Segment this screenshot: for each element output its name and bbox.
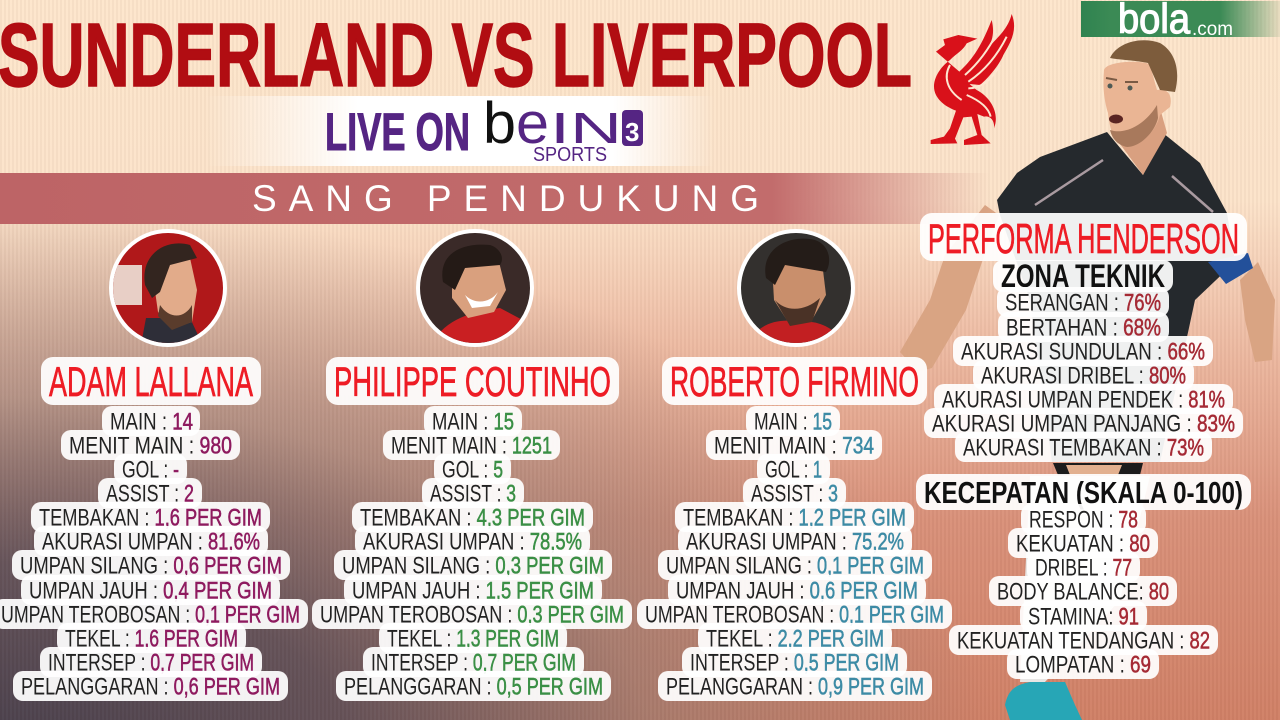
stats: Kecepatan: KEKUATAN : 80 — [1016, 530, 1150, 558]
stats: Zona Teknik: AKURASI SUNDULAN : 66% — [961, 338, 1205, 366]
stats: Kecepatan: LOMPATAN : 69 — [1015, 652, 1151, 678]
stats: Philippe Coutinho — [312, 406, 632, 701]
stats: Kecepatan: BODY BALANCE: 80 — [997, 578, 1169, 606]
stats: Philippe Coutinho: AKURASI UMPAN : 78,5% — [363, 528, 582, 556]
stats: Roberto Firmino: UMPAN SILANG : 0,1 PER GIM — [666, 552, 924, 580]
stats: Adam Lallana: MENIT MAIN : 980 — [69, 432, 232, 460]
stats: Adam Lallana — [0, 406, 308, 701]
stats: Adam Lallana: INTERSEP : 0,7 PER GIM — [48, 650, 254, 676]
stats: Adam Lallana: GOL : - — [122, 456, 179, 484]
stats: Adam Lallana: TEKEL : 1,6 PER GIM — [65, 626, 238, 652]
subheading: Zona Teknik: ZONA TEKNIK — [1001, 258, 1165, 294]
section banner: Sang Pendukung: SANG PENDUKUNG — [252, 178, 759, 219]
stats: Adam Lallana: UMPAN TEROBOSAN : 0,1 PER GIM — [1, 602, 300, 628]
stats: Roberto Firmino — [637, 406, 952, 701]
stats: Zona Teknik: BERTAHAN : 68% — [1006, 314, 1161, 342]
panel: Philippe Coutinho — [312, 229, 632, 701]
stats: Roberto Firmino: UMPAN JAUH : 0,6 PER GIM — [676, 578, 918, 604]
stats: Kecepatan — [949, 504, 1218, 679]
photo: Jordan Henderson — [900, 40, 1275, 720]
panel: Roberto Firmino — [637, 229, 952, 701]
brand: bola.com — [1081, 0, 1280, 42]
broadcast strip: live on beIN Sports: e — [516, 91, 549, 156]
stats: Adam Lallana: MAIN : 14 — [110, 408, 193, 436]
section banner: Sang Pendukung — [0, 173, 990, 224]
name: Roberto Firmino — [662, 357, 927, 405]
broadcast strip: live on beIN Sports: SPORTS — [533, 144, 607, 166]
panel: Performa Henderson — [916, 213, 1251, 679]
stats: Roberto Firmino: INTERSEP : 0,5 PER GIM — [690, 650, 899, 676]
stats: Philippe Coutinho: UMPAN JAUH : 1,5 PER GIM — [352, 578, 594, 604]
name: Adam Lallana — [41, 357, 261, 405]
stats: Philippe Coutinho: ASSIST : 3 — [430, 480, 516, 508]
stats: Roberto Firmino: ASSIST : 3 — [751, 480, 838, 508]
stats: Zona Teknik: AKURASI TEMBAKAN : 73% — [963, 434, 1204, 462]
stats: Adam Lallana: AKURASI UMPAN : 81,6% — [42, 528, 260, 556]
stats: Zona Teknik: SERANGAN : 76% — [1005, 290, 1161, 316]
stats: Zona Teknik: AKURASI UMPAN PANJANG : 83% — [932, 410, 1235, 438]
stats: Philippe Coutinho: UMPAN TEROBOSAN : 0,3 PER GIM — [320, 602, 624, 628]
stats: Roberto Firmino: MAIN : 15 — [754, 408, 832, 436]
stats: Philippe Coutinho: MAIN : 15 — [432, 408, 514, 436]
stats: Philippe Coutinho: PELANGGARAN : 0,5 PER GIM — [344, 674, 603, 700]
icon: Liverpool liver bird crest — [931, 14, 1014, 145]
stats: Adam Lallana: ASSIST : 2 — [106, 480, 194, 508]
stats: Philippe Coutinho: GOL : 5 — [442, 456, 503, 484]
stats: Roberto Firmino: TEMBAKAN : 1,2 PER GIM — [683, 504, 906, 532]
name: Roberto Firmino: ROBERTO FIRMINO — [670, 358, 919, 405]
broadcast strip: live on beIN Sports — [205, 91, 715, 166]
stats: Roberto Firmino: AKURASI UMPAN : 75,2% — [686, 528, 904, 556]
stats: Adam Lallana: UMPAN JAUH : 0,4 PER GIM — [29, 578, 272, 604]
stats: Kecepatan: STAMINA: 91 — [1028, 604, 1139, 630]
portrait: Roberto Firmino — [737, 229, 855, 350]
name: Philippe Coutinho — [326, 357, 619, 405]
broadcast strip: live on beIN Sports: 3 — [625, 117, 639, 147]
stats: Philippe Coutinho: INTERSEP : 0,7 PER GIM — [371, 650, 576, 676]
name: Adam Lallana: ADAM LALLANA — [49, 358, 253, 405]
stats: Adam Lallana: UMPAN SILANG : 0,6 PER GIM — [20, 552, 282, 580]
stats: Kecepatan: RESPON : 78 — [1029, 506, 1138, 534]
broadcast strip: live on beIN Sports: b — [483, 91, 516, 156]
stats: Philippe Coutinho: UMPAN SILANG : 0,3 PER GIM — [342, 552, 604, 580]
stats: Kecepatan: KEKUATAN TENDANGAN : 82 — [957, 628, 1210, 654]
name: Philippe Coutinho: PHILIPPE COUTINHO — [334, 358, 611, 405]
stats: Zona Teknik: AKURASI DRIBEL : 80% — [981, 362, 1186, 390]
stats: Philippe Coutinho: TEKEL : 1,3 PER GIM — [387, 626, 559, 652]
portrait: Philippe Coutinho — [416, 229, 534, 350]
stats: Zona Teknik — [924, 287, 1243, 462]
stats: Kecepatan: DRIBEL : 77 — [1035, 554, 1132, 582]
portrait: Adam Lallana — [109, 229, 227, 350]
stats: Adam Lallana: PELANGGARAN : 0,6 PER GIM — [21, 674, 280, 700]
brand: bola.com: .com — [1192, 19, 1233, 40]
broadcast strip: live on beIN Sports: LIVE ON — [325, 103, 470, 162]
stats: Roberto Firmino: GOL : 1 — [765, 456, 822, 484]
stats: Roberto Firmino: TEKEL : 2,2 PER GIM — [706, 626, 884, 652]
panel: Adam Lallana — [0, 229, 308, 701]
stats: Roberto Firmino: PELANGGARAN : 0,9 PER GIM — [666, 674, 924, 700]
stats: Roberto Firmino: MENIT MAIN : 734 — [714, 432, 874, 460]
broadcast strip: live on beIN Sports: IN — [550, 104, 622, 153]
stats: Roberto Firmino: UMPAN TEROBOSAN : 0,1 PER GIM — [645, 602, 944, 628]
stats: Zona Teknik: AKURASI UMPAN PENDEK : 81% — [942, 386, 1225, 414]
stats: Philippe Coutinho: TEMBAKAN : 4,3 PER GIM — [360, 504, 585, 532]
stats: Adam Lallana: TEMBAKAN : 1,6 PER GIM — [39, 504, 262, 532]
stats: Philippe Coutinho: MENIT MAIN : 1251 — [391, 432, 552, 460]
